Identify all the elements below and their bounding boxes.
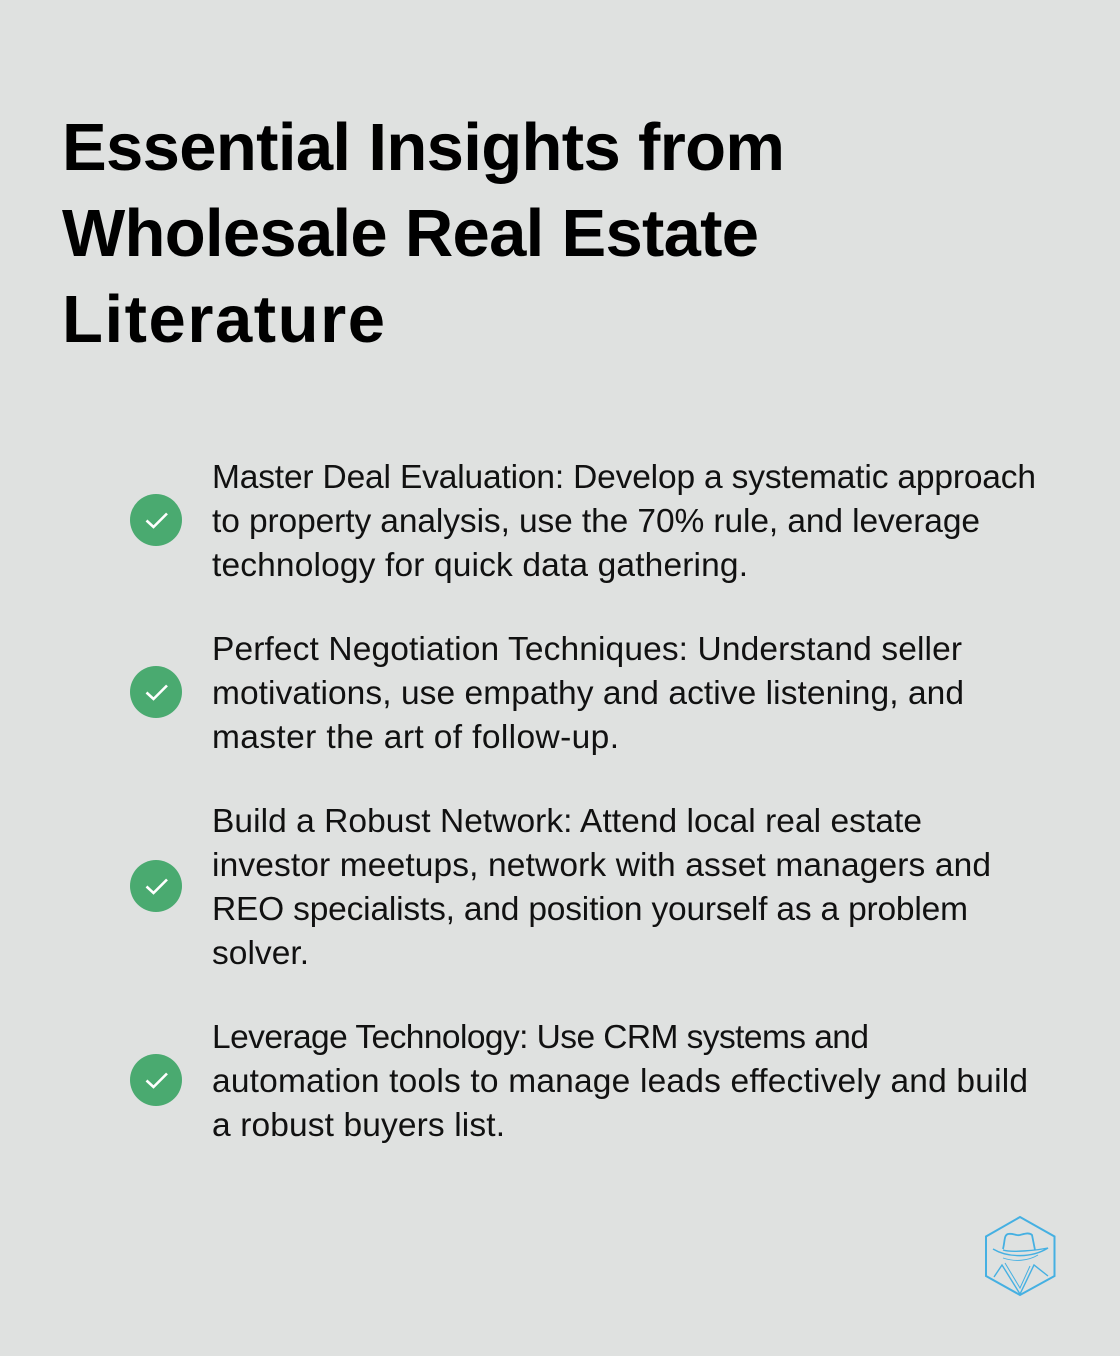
text: leverage technology: a robust buyers list. bbox=[212, 1107, 505, 1144]
title: Wholesale Real Estate bbox=[62, 196, 759, 271]
icon: check circle 3 bbox=[130, 860, 182, 912]
text: master deal evaluation: to property analysis, use the 70% rule, and leverage bbox=[212, 503, 980, 540]
text: master deal evaluation: Master Deal Evaluation: Develop a systematic approach bbox=[212, 459, 1036, 496]
icon: check circle 2 bbox=[130, 666, 182, 718]
icon: check circle 4 bbox=[130, 1054, 182, 1106]
item 3: build a robust network bbox=[130, 803, 991, 972]
icon: check circle 1 bbox=[130, 494, 182, 546]
text: leverage technology bbox=[212, 1019, 1028, 1144]
text: build a robust network: investor meetups, network with asset managers and bbox=[212, 847, 991, 884]
text: perfect negotiation techniques: motivations, use empathy and active listening, and bbox=[212, 675, 964, 712]
title bbox=[62, 110, 785, 357]
text: perfect negotiation techniques: master the art of follow-up. bbox=[212, 719, 619, 756]
text: build a robust network: solver. bbox=[212, 935, 309, 972]
text: build a robust network: Build a Robust Network: Attend local real estate bbox=[212, 803, 922, 840]
item 1: master deal evaluation bbox=[130, 459, 1036, 584]
text: master deal evaluation bbox=[212, 459, 1036, 584]
text: perfect negotiation techniques: Perfect Negotiation Techniques: Understand seller bbox=[212, 631, 962, 668]
icon: logo, hexagon with hat and collar bbox=[986, 1217, 1054, 1295]
title: Essential Insights from bbox=[62, 110, 785, 185]
text: leverage technology: Leverage Technology: Use CRM systems and bbox=[212, 1019, 869, 1056]
text: perfect negotiation techniques bbox=[212, 631, 964, 756]
text: master deal evaluation: technology for quick data gathering. bbox=[212, 547, 748, 584]
text: build a robust network: REO specialists, and position yourself as a problem bbox=[212, 891, 968, 928]
item 2: perfect negotiation techniques bbox=[130, 631, 964, 756]
text: build a robust network bbox=[212, 803, 991, 972]
text: leverage technology: automation tools to manage leads effectively and build bbox=[212, 1063, 1028, 1100]
item 4: leverage technology bbox=[130, 1019, 1028, 1144]
title: Literature bbox=[62, 282, 385, 357]
